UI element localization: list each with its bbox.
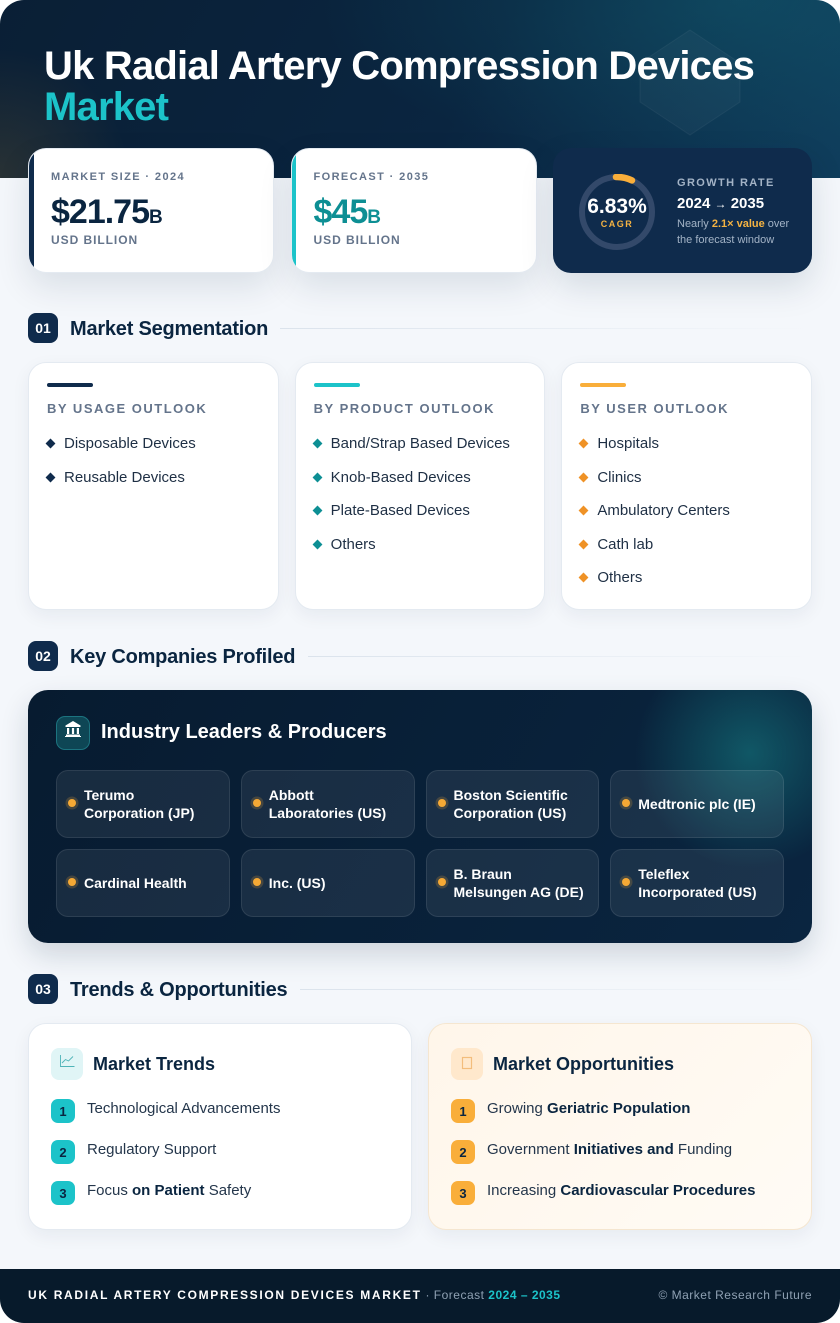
section heading: segmentation: Market Segmentation bbox=[70, 318, 268, 340]
KPI card: growth rate bbox=[553, 148, 812, 273]
panel: market opportunities bbox=[428, 1023, 812, 1230]
panel: user outlook: Cath lab bbox=[597, 536, 653, 553]
panel: usage outlook: Disposable Devices bbox=[64, 435, 196, 452]
panel: industry leaders: Melsungen AG (DE) bbox=[454, 884, 584, 900]
panel: industry leaders: Medtronic plc (IE) bbox=[638, 796, 756, 812]
icon: institution bbox=[56, 716, 90, 750]
panel: product outlook: Knob-Based Devices bbox=[331, 469, 471, 486]
panel: user outlook: Ambulatory Centers bbox=[597, 502, 730, 519]
panel: market trends: Regulatory Support bbox=[87, 1141, 216, 1158]
panel: market trends: 3 bbox=[59, 1186, 67, 1201]
KPI card: forecast bbox=[290, 148, 536, 273]
CAGR value: 6.83% bbox=[587, 195, 647, 218]
icon: placeholder box bbox=[451, 1048, 483, 1080]
panel: market opportunities: Government Initiatives and Funding bbox=[487, 1141, 732, 1158]
panel: user outlook: Hospitals bbox=[597, 435, 659, 452]
panel: market opportunities: Growing Geriatric Population bbox=[487, 1100, 690, 1117]
panel: user outlook: Clinics bbox=[597, 469, 642, 486]
title: Market bbox=[44, 85, 168, 129]
section heading: trends: Trends & Opportunities bbox=[70, 979, 287, 1001]
panel: user outlook bbox=[561, 362, 812, 610]
panel: industry leaders bbox=[28, 690, 812, 943]
panel: market opportunities: 2 bbox=[459, 1145, 467, 1160]
panel heading: Industry Leaders & Producers bbox=[101, 721, 387, 743]
section heading: companies: Key Companies Profiled bbox=[70, 646, 295, 668]
section heading: segmentation: 01 bbox=[35, 320, 51, 336]
panel: market trends: Market Trends bbox=[93, 1054, 215, 1074]
KPI card: forecast: USD BILLION bbox=[314, 233, 401, 247]
panel: market trends: Focus on Patient Safety bbox=[87, 1182, 251, 1199]
panel: usage outlook: BY USAGE OUTLOOK bbox=[47, 401, 207, 416]
panel: product outlook bbox=[295, 362, 545, 610]
KPI card: forecast: FORECAST · 2035 bbox=[314, 171, 429, 183]
growth note: the forecast window bbox=[677, 234, 774, 246]
panel: market opportunities: Market Opportunities bbox=[493, 1054, 674, 1074]
panel: market opportunities: 3 bbox=[459, 1186, 467, 1201]
hero header band bbox=[0, 0, 840, 178]
company chips: Corporation (JP) bbox=[84, 805, 194, 821]
panel: market trends bbox=[28, 1023, 412, 1230]
panel: market trends: Technological Advancements bbox=[87, 1100, 280, 1117]
footer credit: © Market Research Future bbox=[658, 1288, 812, 1302]
panel: market opportunities: Increasing Cardiovascular Procedures bbox=[487, 1182, 755, 1199]
growth note: Nearly 2.1× value over bbox=[677, 218, 789, 230]
section heading: trends bbox=[28, 974, 648, 1004]
panel: industry leaders: Incorporated (US) bbox=[638, 884, 756, 900]
panel: industry leaders: Teleflex bbox=[638, 866, 689, 882]
panel: industry leaders: Boston Scientific bbox=[454, 786, 568, 802]
panel: product outlook: BY PRODUCT OUTLOOK bbox=[314, 401, 495, 416]
footer title: UK RADIAL ARTERY COMPRESSION DEVICES MARKET · Forecast 2024 – 2035 bbox=[28, 1288, 561, 1302]
title bbox=[44, 44, 754, 129]
panel: usage outlook bbox=[28, 362, 279, 610]
KPI card: market size: $21.75B bbox=[51, 193, 163, 231]
panel: market trends: 1 bbox=[59, 1104, 67, 1119]
panel: usage outlook: Reusable Devices bbox=[64, 469, 185, 486]
panel: product outlook: Others bbox=[331, 536, 376, 553]
decorative hexagon bbox=[640, 30, 740, 136]
panel: industry leaders: Abbott bbox=[269, 786, 314, 802]
CAGR label: CAGR bbox=[601, 219, 633, 229]
section heading: companies bbox=[28, 641, 648, 671]
panel: industry leaders: B. Braun bbox=[454, 866, 512, 882]
panel: industry leaders: Laboratories (US) bbox=[269, 805, 386, 821]
year range: 2024 → 2035 bbox=[677, 195, 764, 212]
panel: market opportunities: 1 bbox=[459, 1104, 467, 1119]
panel: industry leaders: Cardinal Health bbox=[84, 875, 187, 891]
company chips: Terumo bbox=[84, 786, 134, 802]
KPI card: market size bbox=[28, 148, 274, 273]
growth note bbox=[677, 218, 789, 246]
icon: chart bbox=[51, 1048, 83, 1080]
growth rate label: GROWTH RATE bbox=[677, 177, 775, 189]
panel: product outlook: Plate-Based Devices bbox=[331, 502, 470, 519]
panel: user outlook: Others bbox=[597, 569, 642, 586]
panel: user outlook: BY USER OUTLOOK bbox=[580, 401, 729, 416]
panel: market trends: 2 bbox=[59, 1145, 67, 1160]
panel: industry leaders: Inc. (US) bbox=[269, 875, 326, 891]
CAGR ring bbox=[579, 174, 655, 250]
KPI card: market size: MARKET SIZE · 2024 bbox=[51, 171, 185, 183]
company chips bbox=[56, 770, 230, 838]
KPI card: market size: USD BILLION bbox=[51, 233, 138, 247]
section heading: companies: 02 bbox=[35, 648, 51, 664]
section heading: trends: 03 bbox=[35, 981, 51, 997]
panel: industry leaders: Corporation (US) bbox=[454, 805, 566, 821]
panel: product outlook: Band/Strap Based Devices bbox=[331, 435, 510, 452]
KPI card: forecast: $45B bbox=[314, 193, 381, 231]
footer bbox=[0, 1269, 840, 1323]
title: Uk Radial Artery Compression Devices bbox=[44, 44, 754, 88]
section heading: segmentation bbox=[28, 313, 642, 343]
